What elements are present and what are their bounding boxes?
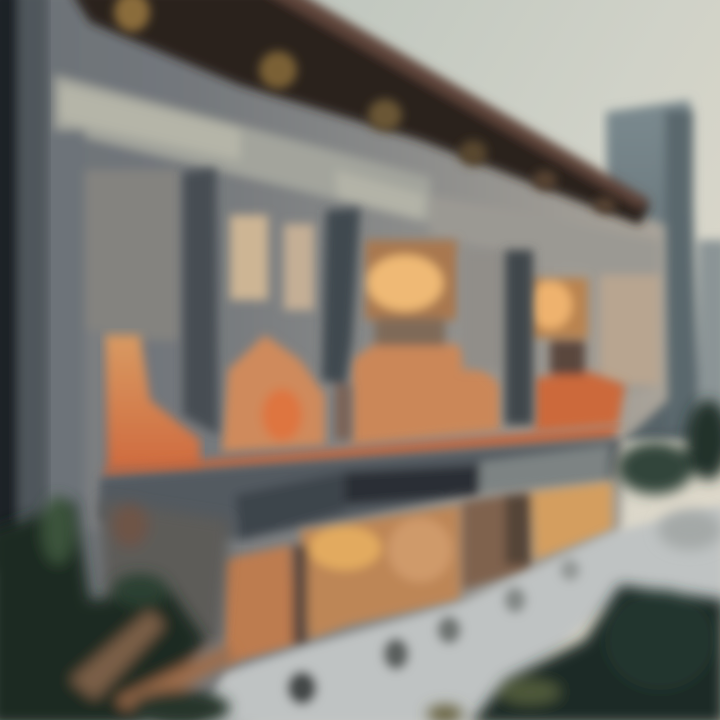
- central warm panel: [222, 215, 325, 452]
- foreground foliage right: [427, 585, 720, 720]
- vertical dark fins: [183, 168, 533, 440]
- left dark column: [0, 0, 48, 570]
- roof overhang: [70, 0, 650, 225]
- lower floor warm interior: [222, 482, 612, 665]
- far right warm panel: [462, 250, 625, 432]
- lower left wall: [100, 500, 230, 700]
- right warm panel: [352, 240, 500, 445]
- tree foliage mid right: [617, 400, 720, 550]
- foreground foliage left: [0, 496, 235, 720]
- upper windows and warm interior: [105, 215, 625, 470]
- staircase with steps: [195, 505, 720, 720]
- balcony slab: [100, 438, 620, 540]
- balcony edge: [105, 425, 620, 478]
- distant tower: [606, 100, 720, 450]
- roof lights: [114, 0, 616, 213]
- lower left warm panel: [105, 335, 200, 470]
